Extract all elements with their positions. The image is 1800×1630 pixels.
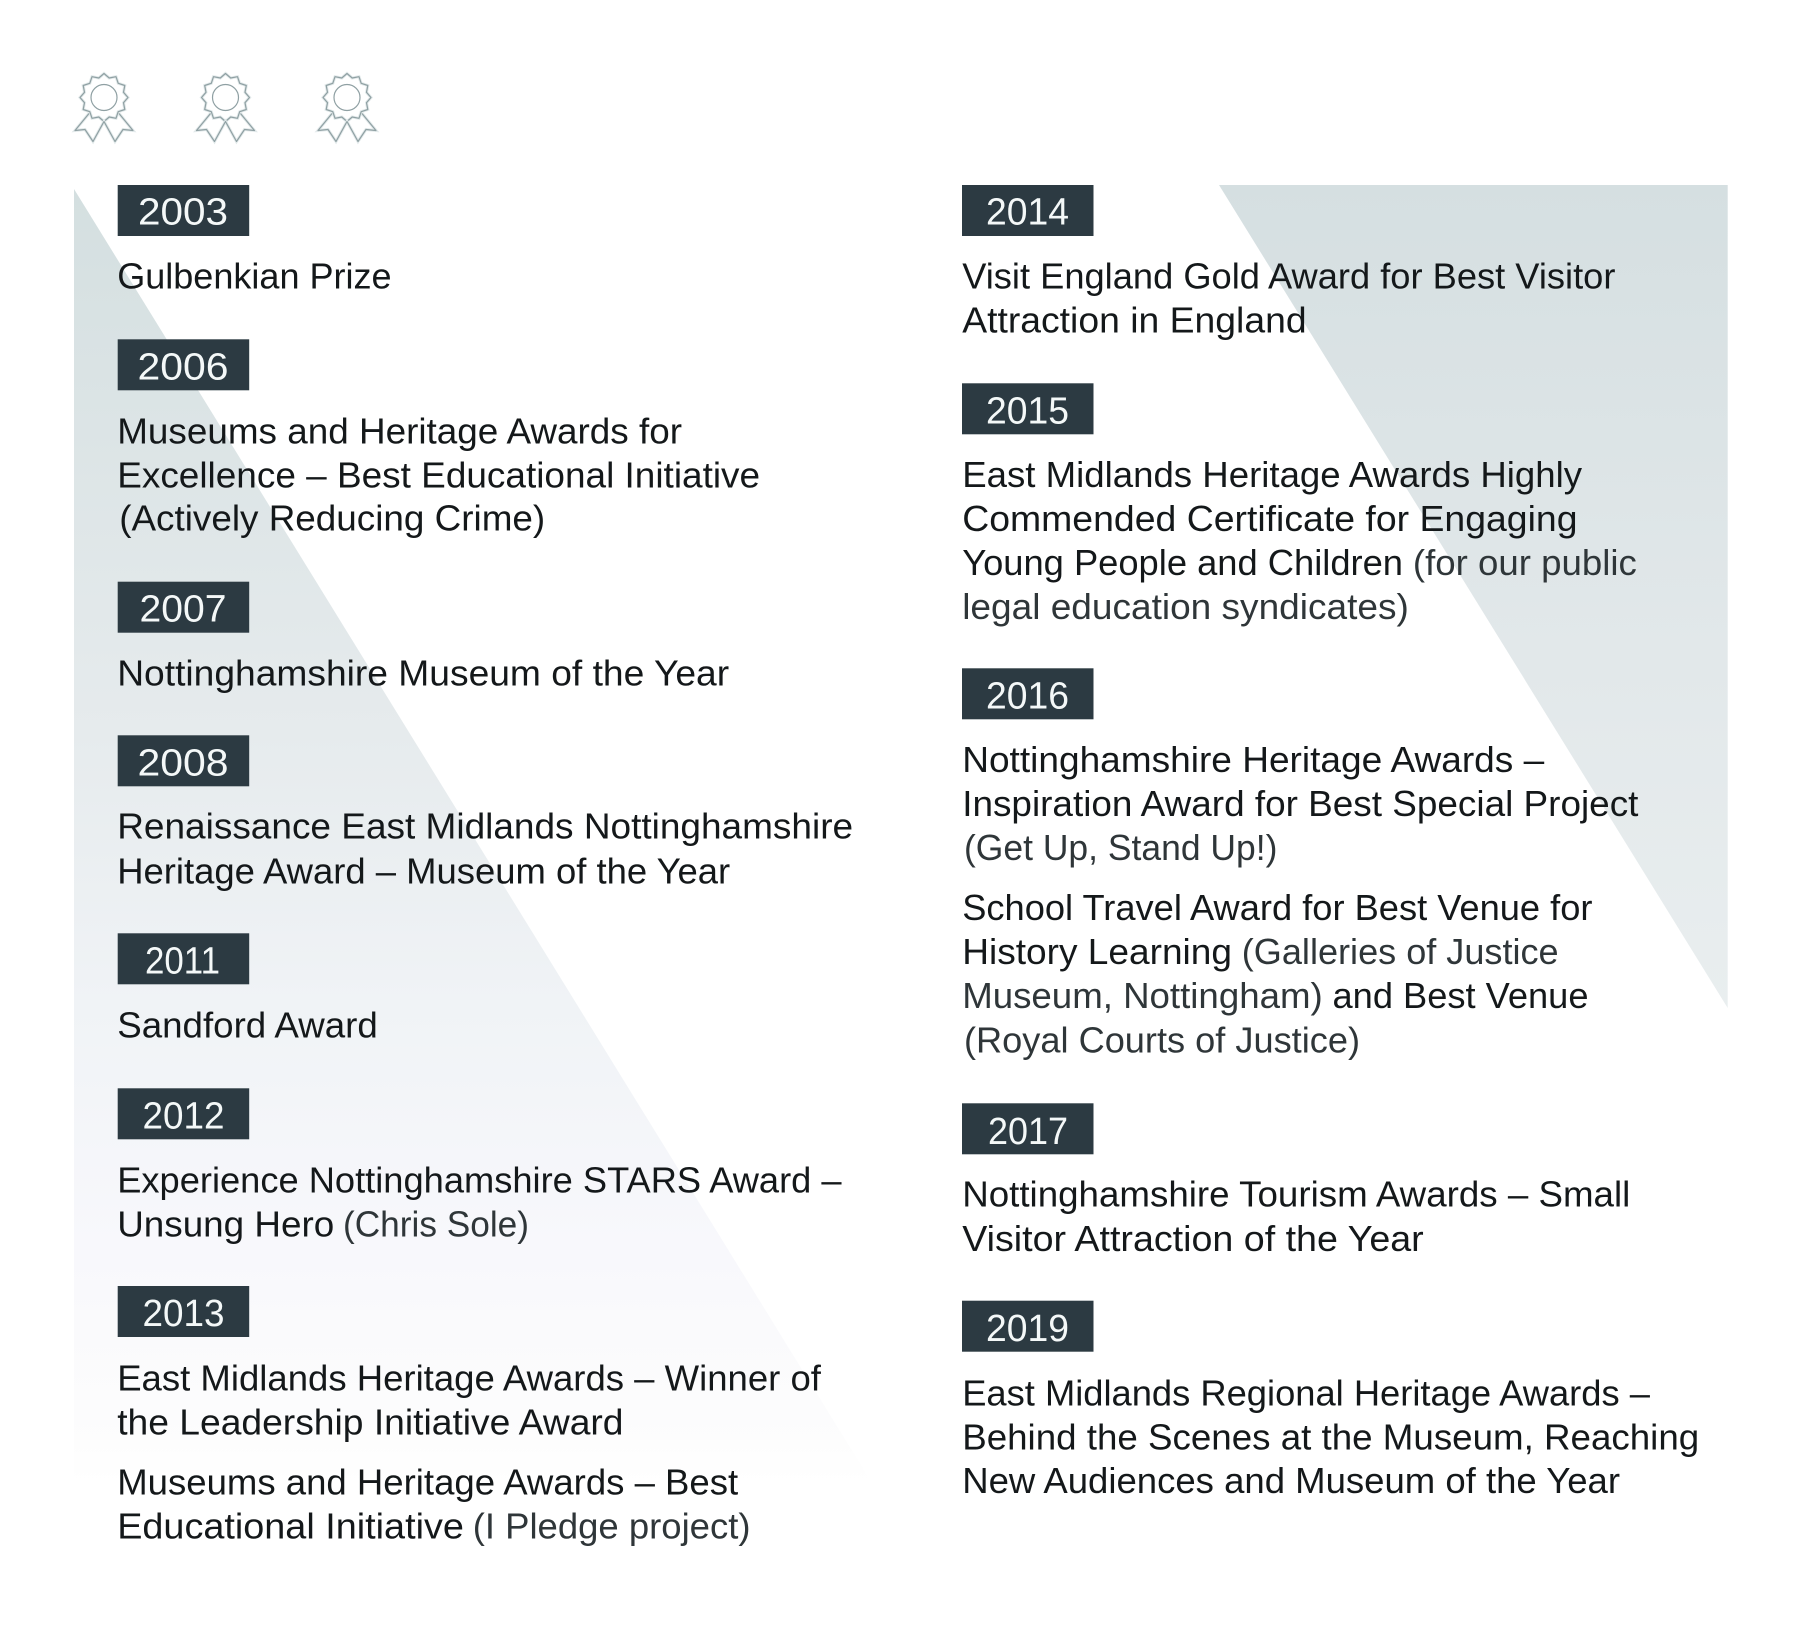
award text: 2013 educational <box>117 1461 750 1546</box>
entry: 2007 <box>117 582 729 693</box>
year badge: 2011 <box>118 933 249 984</box>
entry: 2003 <box>117 185 392 296</box>
award text: 2015: (for our public <box>1413 542 1637 583</box>
award text: 2006: Museums and Heritage Awards for <box>117 410 682 451</box>
award text: 2019 <box>962 1372 1699 1501</box>
award text: 2016 school travel: School Travel Award for Best Venue for <box>962 887 1593 928</box>
year badge: 2015 <box>962 383 1094 434</box>
entry: 2019 <box>962 1301 1699 1501</box>
year badge: 2014: 2014 <box>986 192 1069 234</box>
entry: 2008 <box>117 735 853 891</box>
award text: 2008: Heritage Award – Museum of the Year <box>117 850 730 891</box>
entry: 2012 <box>117 1088 842 1244</box>
entry: 2014 <box>962 185 1615 340</box>
year badge: 2019: 2019 <box>986 1308 1069 1350</box>
award text: 2017: Visitor Attraction of the Year <box>962 1218 1424 1259</box>
left column of awards <box>117 185 853 1546</box>
award text: 2015: Commended Certificate for Engaging <box>962 498 1578 539</box>
right column of awards <box>962 185 1699 1501</box>
year badge: 2011: 2011 <box>145 941 220 983</box>
award text: 2014: Attraction in England <box>962 299 1307 340</box>
award text: 2016 inspiration: Nottinghamshire Heritage Awards – <box>962 739 1544 780</box>
award text: 2013 leadership <box>117 1357 822 1442</box>
award text: 2016 school travel <box>962 887 1593 1060</box>
award text: 2016 inspiration: Inspiration Award for Best Special Project <box>962 783 1638 824</box>
award text: 2012: (Chris Sole) <box>343 1203 529 1244</box>
award text: 2003: Gulbenkian Prize <box>117 255 392 296</box>
award text: 2013 educational: Museums and Heritage Awards – Best <box>117 1461 738 1502</box>
year badge: 2007: 2007 <box>140 589 226 631</box>
award text: 2016 school travel: Museum, Nottingham) <box>962 975 1323 1016</box>
award text: 2006: Excellence – Best Educational Initiative <box>117 454 760 495</box>
year badge: 2003: 2003 <box>138 192 228 234</box>
year badge: 2012: 2012 <box>142 1096 224 1138</box>
award text: 2013 leadership: East Midlands Heritage Awards – Winner of <box>117 1357 822 1398</box>
icon: rosette 3 <box>318 74 376 142</box>
award text: 2019: East Midlands Regional Heritage Awards – <box>962 1372 1650 1413</box>
year badge: 2016: 2016 <box>986 676 1069 718</box>
award text: 2016 school travel: (Galleries of Justice <box>1242 931 1559 972</box>
award text: 2016 school travel: (Royal Courts of Justice) <box>964 1019 1360 1060</box>
award text: 2008 <box>117 805 853 891</box>
icon row: award rosettes <box>75 74 376 142</box>
year badge: 2006: 2006 <box>138 347 228 389</box>
entry: 2016 <box>962 668 1638 1060</box>
award text: 2012 <box>117 1159 842 1244</box>
award text: 2016 inspiration <box>962 739 1638 868</box>
award text: 2016 school travel: and Best Venue <box>1333 975 1589 1016</box>
year badge: 2017: 2017 <box>988 1111 1068 1153</box>
award text: 2008: Renaissance East Midlands Nottinghamshire <box>117 805 853 846</box>
award text: 2015 <box>962 454 1637 627</box>
award text: 2017 <box>962 1173 1630 1259</box>
award text: 2007: Nottinghamshire Museum of the Year <box>117 652 729 693</box>
year badge: 2008 <box>118 735 249 786</box>
award text: 2012: Unsung Hero <box>117 1203 334 1244</box>
award text: 2012: Experience Nottinghamshire STARS Award – <box>117 1159 842 1200</box>
award text: 2013 leadership: the Leadership Initiative Award <box>117 1401 623 1442</box>
award text: 2016 school travel: History Learning <box>962 931 1232 972</box>
entry: 2015 <box>962 383 1637 627</box>
award text: 2013 educational: (I Pledge project) <box>473 1505 750 1546</box>
year badge: 2007 <box>118 582 249 633</box>
year badge: 2012 <box>118 1088 249 1139</box>
background triangle: right <box>1219 185 1728 1008</box>
entry: 2017 <box>962 1103 1630 1259</box>
entry: 2006 <box>117 339 760 538</box>
award text: 2019: Behind the Scenes at the Museum, Reaching <box>962 1416 1699 1457</box>
year badge: 2013 <box>118 1286 249 1337</box>
award text: 2006: (Actively Reducing Crime) <box>119 497 545 538</box>
award text: 2015: East Midlands Heritage Awards Highly <box>962 454 1582 495</box>
award text: 2019: New Audiences and Museum of the Year <box>962 1460 1620 1501</box>
entry: 2013 <box>117 1286 822 1546</box>
background triangle: left <box>74 189 872 1483</box>
entry: 2011 <box>117 933 378 1045</box>
year badge: 2008: 2008 <box>138 743 228 785</box>
award text: 2013 educational: Educational Initiative <box>117 1505 464 1546</box>
award text: 2017: Nottinghamshire Tourism Awards – Small <box>962 1173 1630 1214</box>
award text: 2011: Sandford Award <box>117 1004 378 1045</box>
award text: 2006 <box>117 410 760 538</box>
award text: 2014 <box>962 255 1615 340</box>
year badge: 2019 <box>962 1301 1094 1352</box>
icon: rosette 2 <box>196 74 254 142</box>
year badge: 2015: 2015 <box>986 391 1069 433</box>
year badge: 2017 <box>962 1103 1094 1154</box>
year badge: 2003 <box>118 185 249 236</box>
award text: 2014: Visit England Gold Award for Best Visitor <box>962 255 1615 296</box>
year badge: 2013: 2013 <box>142 1293 224 1335</box>
icon: rosette 1 <box>75 74 133 142</box>
award text: 2015: legal education syndicates) <box>962 586 1409 627</box>
award text: 2015: Young People and Children <box>962 542 1403 583</box>
year badge: 2006 <box>118 339 249 390</box>
award text: 2016 inspiration: (Get Up, Stand Up!) <box>964 827 1277 868</box>
year badge: 2014 <box>962 185 1094 236</box>
year badge: 2016 <box>962 668 1094 719</box>
